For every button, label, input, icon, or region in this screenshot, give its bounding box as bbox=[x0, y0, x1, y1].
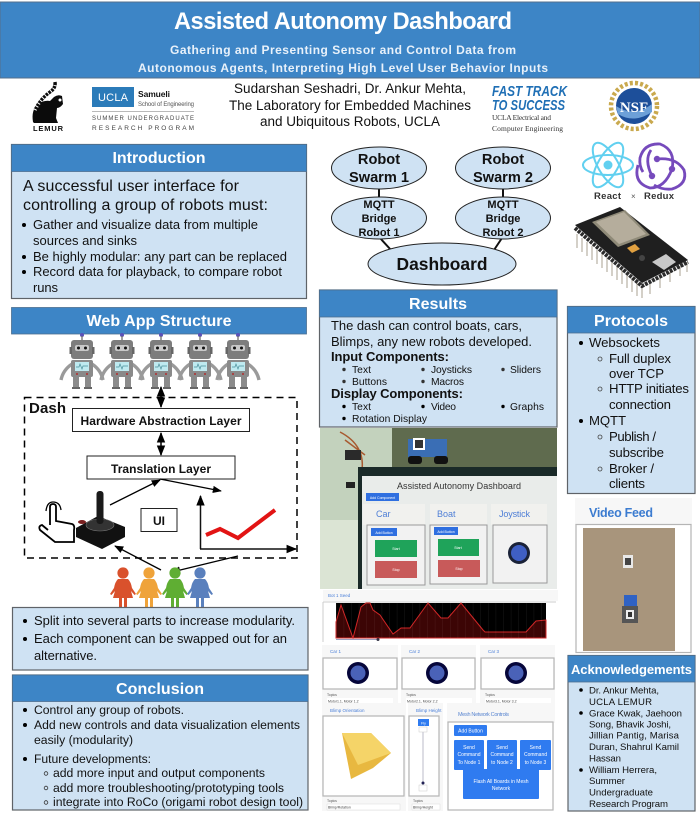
acknowledgements list: Duran, Shahrul Kamil bbox=[589, 742, 679, 753]
results intro bbox=[331, 318, 532, 349]
flash all boards bbox=[463, 769, 539, 799]
photo: dashboard on tablet with robots bbox=[320, 428, 557, 589]
icon: robot swarm bbox=[61, 333, 259, 389]
title banner bbox=[0, 2, 700, 78]
acknowledgements list: Summer bbox=[589, 776, 626, 787]
send to node 1: Command bbox=[457, 752, 481, 758]
joystick card: car 2 bbox=[401, 645, 476, 704]
send to node 2: to Node 2 bbox=[491, 760, 513, 766]
panel: structure notes bbox=[12, 608, 308, 670]
introduction bullets: Be highly modular: any part can be replaced bbox=[33, 249, 287, 264]
send to node 3 bbox=[520, 740, 551, 770]
panel: conclusion bbox=[12, 675, 308, 810]
node: dashboard bbox=[368, 243, 516, 285]
card labels bbox=[376, 509, 530, 519]
rotation display: Topics bbox=[327, 799, 337, 803]
introduction bullets: sources and sinks bbox=[33, 233, 138, 248]
conclusion bullets: Future developments: bbox=[34, 752, 151, 766]
protocols list: subscribe bbox=[609, 445, 664, 460]
logo: LEMUR: LEMUR bbox=[33, 124, 64, 133]
logo: Fast Track to Success: UCLA Electrical and bbox=[492, 113, 551, 122]
dash container bbox=[24, 398, 297, 558]
joystick card: car 2: Topics bbox=[406, 693, 416, 697]
node: dashboard: Dashboard bbox=[396, 254, 488, 274]
boat controls bbox=[430, 525, 487, 584]
graph component bbox=[323, 590, 558, 642]
logo: Redux: × bbox=[631, 192, 636, 201]
acknowledgements list bbox=[579, 686, 682, 810]
logo: Fast Track to Success: FAST TRACK bbox=[492, 83, 568, 100]
acknowledgements list: UCLA LEMUR bbox=[589, 697, 652, 708]
protocols list: connection bbox=[609, 397, 671, 412]
video frame bbox=[583, 528, 675, 651]
display components list: Rotation Display bbox=[352, 414, 428, 425]
arrow: translation to chart bbox=[160, 479, 221, 491]
logo: Fast Track to Success: Computer Engineering bbox=[492, 124, 563, 133]
height slider: Blimp/Height bbox=[413, 806, 433, 810]
logo: UCLA Samueli: School of Engineering bbox=[138, 102, 194, 108]
logo: UCLA Samueli: Samueli bbox=[138, 89, 170, 99]
conclusion heading bbox=[12, 675, 308, 702]
dash label: Dash bbox=[29, 400, 66, 417]
conclusion sub bullets: add more input and output components bbox=[53, 766, 265, 780]
arrow: HAL to translation bbox=[160, 433, 162, 455]
heading: web app structure bbox=[12, 308, 306, 334]
protocols heading bbox=[568, 306, 695, 333]
height slider: Topics bbox=[413, 799, 423, 803]
input components list: Text bbox=[352, 365, 371, 376]
card labels: Car bbox=[376, 509, 391, 519]
results heading: Results bbox=[409, 296, 467, 313]
screen title: Assisted Autonomy Dashboard bbox=[397, 481, 521, 491]
display components list: Display Components: bbox=[331, 386, 463, 401]
panel: acknowledgements bbox=[568, 656, 695, 811]
acknowledgements list: Dr. Ankur Mehta, bbox=[589, 686, 659, 696]
introduction lead text bbox=[23, 178, 268, 214]
joystick card: car 1 bbox=[322, 645, 398, 704]
node: robot swarm 1: Robot bbox=[358, 152, 400, 168]
node: MQTT bridge robot 2 bbox=[456, 197, 550, 239]
node: robot swarm 1 bbox=[332, 147, 426, 189]
conclusion sub bullets bbox=[44, 766, 303, 809]
UI box: UI bbox=[153, 514, 165, 528]
translation layer box bbox=[87, 456, 235, 479]
acknowledgements list: Jillian Pantig, Marisa bbox=[589, 730, 680, 742]
protocols list: Full duplex bbox=[609, 351, 671, 366]
node: MQTT bridge robot 1 bbox=[332, 197, 426, 239]
rotation display bbox=[322, 703, 406, 811]
protocols list bbox=[579, 335, 689, 491]
introduction heading bbox=[12, 144, 306, 172]
input components list: Macros bbox=[431, 377, 464, 388]
send to node 1 bbox=[454, 740, 484, 770]
node: MQTT bridge robot 1: MQTT bbox=[363, 199, 395, 211]
conclusion bullets: easily (modularity) bbox=[34, 733, 133, 747]
panel: structure notes: Split into several parts to increase modularity. bbox=[34, 613, 295, 628]
rotation display: Blimp Orientation bbox=[330, 708, 365, 713]
mesh network controls bbox=[447, 703, 555, 810]
joystick card: car 3: Topics bbox=[485, 693, 495, 697]
tablet screen bbox=[358, 467, 557, 589]
logo: NSF: NSF bbox=[620, 100, 648, 116]
panel: introduction bbox=[12, 144, 306, 298]
logo: Fast Track to Success bbox=[492, 83, 568, 133]
input components list bbox=[331, 349, 541, 388]
hardware abstraction layer box bbox=[72, 408, 250, 432]
car controls: Add Button bbox=[375, 531, 393, 535]
display components list: Graphs bbox=[510, 402, 544, 413]
image: ESP32 board bbox=[575, 207, 688, 298]
add component button bbox=[366, 493, 399, 501]
arrow: chart to users bbox=[172, 556, 238, 572]
conclusion bullets: Add new controls and data visualization elements bbox=[34, 718, 300, 732]
node: MQTT bridge robot 1: Robot 1 bbox=[359, 227, 399, 239]
logo: LEMUR bbox=[33, 82, 64, 133]
arrow: users to input bbox=[115, 546, 161, 570]
panel: video feed bbox=[575, 498, 692, 652]
introduction lead text: A successful user interface for bbox=[23, 178, 240, 195]
results intro: Blimps, any new robots developed. bbox=[331, 334, 532, 349]
introduction bullets: Gather and visualize data from multiple bbox=[33, 217, 258, 232]
car controls bbox=[367, 525, 425, 585]
title: Assisted Autonomy Dashboard bbox=[174, 9, 512, 35]
video feed heading: Video Feed bbox=[589, 506, 653, 520]
subtitle: Gathering and Presenting Sensor and Control Data from bbox=[170, 43, 516, 57]
protocols heading: Protocols bbox=[594, 313, 668, 330]
panel: structure notes: alternative. bbox=[34, 648, 97, 663]
node: robot swarm 2 bbox=[456, 147, 550, 189]
introduction lead text: controlling a group of robots must: bbox=[23, 197, 268, 214]
acknowledgements list: Research Program bbox=[589, 799, 668, 810]
conclusion heading: Conclusion bbox=[116, 681, 204, 698]
send to node 2: Command bbox=[490, 752, 514, 758]
send to node 2 bbox=[487, 740, 517, 770]
display components list bbox=[331, 386, 544, 425]
add component button: Add Component bbox=[370, 496, 395, 500]
results heading bbox=[320, 290, 557, 317]
arrow: swarm to HAL bbox=[160, 387, 162, 407]
logo: Redux bbox=[631, 144, 685, 202]
conclusion sub bullets: integrate into RoCo (origami robot design tool) bbox=[53, 795, 303, 809]
logo: React: React bbox=[594, 191, 622, 202]
send to node 1: Send bbox=[463, 745, 475, 751]
node: robot swarm 2: Swarm 2 bbox=[473, 170, 533, 186]
input components list: Input Components: bbox=[331, 349, 449, 364]
card labels: Joystick bbox=[499, 509, 530, 519]
send to node 3: to Node 3 bbox=[525, 760, 547, 766]
conclusion sub bullets: add more troubleshooting/prototyping tools bbox=[53, 781, 284, 795]
rotation display: Blimp/Rotation bbox=[328, 806, 351, 810]
subtitle: Autonomous Agents, Interpreting High Level User Behavior Inputs bbox=[138, 61, 548, 75]
acknowledgements list: Grace Kwak, Jaehoon bbox=[589, 708, 682, 720]
joystick card: car 1: Motor1.1, Motor 1.2 bbox=[328, 700, 359, 704]
UI box bbox=[141, 508, 177, 532]
joystick card: car 3: Motor3.1, Motor 3.2 bbox=[486, 700, 517, 704]
send to node 3: Send bbox=[530, 745, 542, 751]
logo: NSF bbox=[611, 83, 657, 129]
add button: Add Button bbox=[458, 728, 483, 734]
joystick card: car 2: Car 2 bbox=[409, 649, 421, 654]
acknowledgements list: William Herrera, bbox=[589, 765, 657, 776]
protocols list: HTTP initiates bbox=[609, 381, 689, 396]
icon: hand pointer bbox=[39, 502, 74, 542]
subtitle bbox=[138, 43, 548, 75]
authors: Sudarshan Seshadri, Dr. Ankur Mehta, bbox=[234, 81, 466, 96]
introduction bullets: runs bbox=[33, 280, 58, 295]
conclusion bullets: Control any group of robots. bbox=[34, 703, 184, 717]
introduction bullets: Record data for playback, to compare robot bbox=[33, 264, 282, 279]
send to node 3: Command bbox=[524, 752, 547, 758]
acknowledgements heading bbox=[568, 656, 695, 682]
height slider: Fly bbox=[421, 722, 426, 726]
diagram: system architecture bbox=[332, 147, 550, 285]
height slider bbox=[408, 703, 443, 811]
acknowledgements list: Song, Bhavik Joshi, bbox=[589, 720, 671, 730]
heading: web app structure: Web App Structure bbox=[86, 313, 232, 330]
joystick card: car 3: Car 3 bbox=[488, 649, 500, 654]
authors: The Laboratory for Embedded Machines bbox=[229, 98, 471, 113]
logo: Redux: Redux bbox=[644, 191, 675, 202]
node: MQTT bridge robot 2: Robot 2 bbox=[483, 227, 523, 239]
panel: structure notes: Each component can be swapped out for an bbox=[34, 631, 287, 646]
logo: UCLA Samueli: SUMMER UNDERGRADUATE bbox=[92, 116, 194, 122]
logo: UCLA Samueli: UCLA bbox=[98, 92, 129, 104]
flash all boards: Network bbox=[492, 786, 511, 792]
arrow: input to translation bbox=[110, 480, 160, 505]
input components list: Buttons bbox=[352, 377, 387, 388]
node: MQTT bridge robot 2: MQTT bbox=[487, 199, 519, 211]
authors: and Ubiquitous Robots, UCLA bbox=[260, 114, 440, 129]
flash all boards: Flash All Boards in Mesh bbox=[473, 779, 529, 785]
logo: UCLA Samueli bbox=[92, 87, 194, 132]
panel: results bbox=[320, 290, 557, 427]
protocols list: MQTT bbox=[589, 413, 626, 428]
boat controls: Add Button bbox=[437, 530, 455, 534]
send to node 2: Send bbox=[496, 745, 508, 751]
joystick card: car 2: Motor2.1, Motor 2.2 bbox=[407, 700, 438, 704]
acknowledgements heading: Acknowledgements bbox=[571, 662, 692, 677]
graph component: Bot 1 Seed bbox=[328, 593, 351, 598]
panel: dashboard screenshots bbox=[320, 590, 558, 815]
robot car bbox=[408, 438, 448, 464]
send to node 1: To Node 1 bbox=[458, 760, 481, 766]
protocols list: over TCP bbox=[609, 366, 664, 381]
joystick card: car 1: Car 1 bbox=[330, 649, 342, 654]
panel: protocols bbox=[568, 306, 695, 494]
joystick card: car 3 bbox=[480, 645, 555, 704]
car controls: Start bbox=[392, 547, 400, 551]
joystick card: car 1: Topics bbox=[327, 693, 337, 697]
hardware abstraction layer box: Hardware Abstraction Layer bbox=[80, 414, 242, 428]
node: robot swarm 1: Swarm 1 bbox=[349, 170, 409, 186]
card labels: Boat bbox=[437, 509, 456, 519]
authors bbox=[229, 81, 471, 129]
input components list: Joysticks bbox=[431, 365, 472, 376]
node: MQTT bridge robot 2: Bridge bbox=[486, 213, 520, 225]
icon: joystick bbox=[76, 491, 125, 549]
line chart icon bbox=[200, 496, 296, 549]
display components list: Video bbox=[431, 402, 456, 413]
boat controls: Stop bbox=[455, 567, 463, 571]
display components list: Text bbox=[352, 402, 371, 413]
logo: React bbox=[583, 138, 633, 202]
car controls: Stop bbox=[392, 568, 400, 572]
introduction heading: Introduction bbox=[112, 150, 206, 167]
height slider: Blimp Height bbox=[416, 708, 442, 713]
mesh network controls: Mesh Network Controls bbox=[458, 712, 509, 718]
conclusion bullets bbox=[23, 703, 300, 766]
acknowledgements list: Undergraduate bbox=[589, 788, 653, 798]
input components list: Sliders bbox=[510, 365, 541, 376]
node: robot swarm 2: Robot bbox=[482, 152, 524, 168]
boat controls: Start bbox=[454, 546, 462, 550]
logo: UCLA Samueli: RESEARCH PROGRAM bbox=[92, 125, 194, 132]
logo: Fast Track to Success: TO SUCCESS bbox=[492, 97, 565, 114]
acknowledgements list: Hassan bbox=[589, 754, 621, 764]
protocols list: Publish / bbox=[609, 429, 656, 444]
node: MQTT bridge robot 1: Bridge bbox=[362, 213, 396, 225]
translation layer box: Translation Layer bbox=[111, 462, 211, 476]
protocols list: Broker / bbox=[609, 461, 654, 476]
introduction bullets bbox=[22, 217, 287, 295]
icon: users bbox=[110, 567, 213, 607]
protocols list: clients bbox=[609, 476, 645, 491]
joystick control bbox=[493, 525, 547, 583]
protocols list: Websockets bbox=[589, 335, 660, 350]
results intro: The dash can control boats, cars, bbox=[331, 318, 522, 333]
